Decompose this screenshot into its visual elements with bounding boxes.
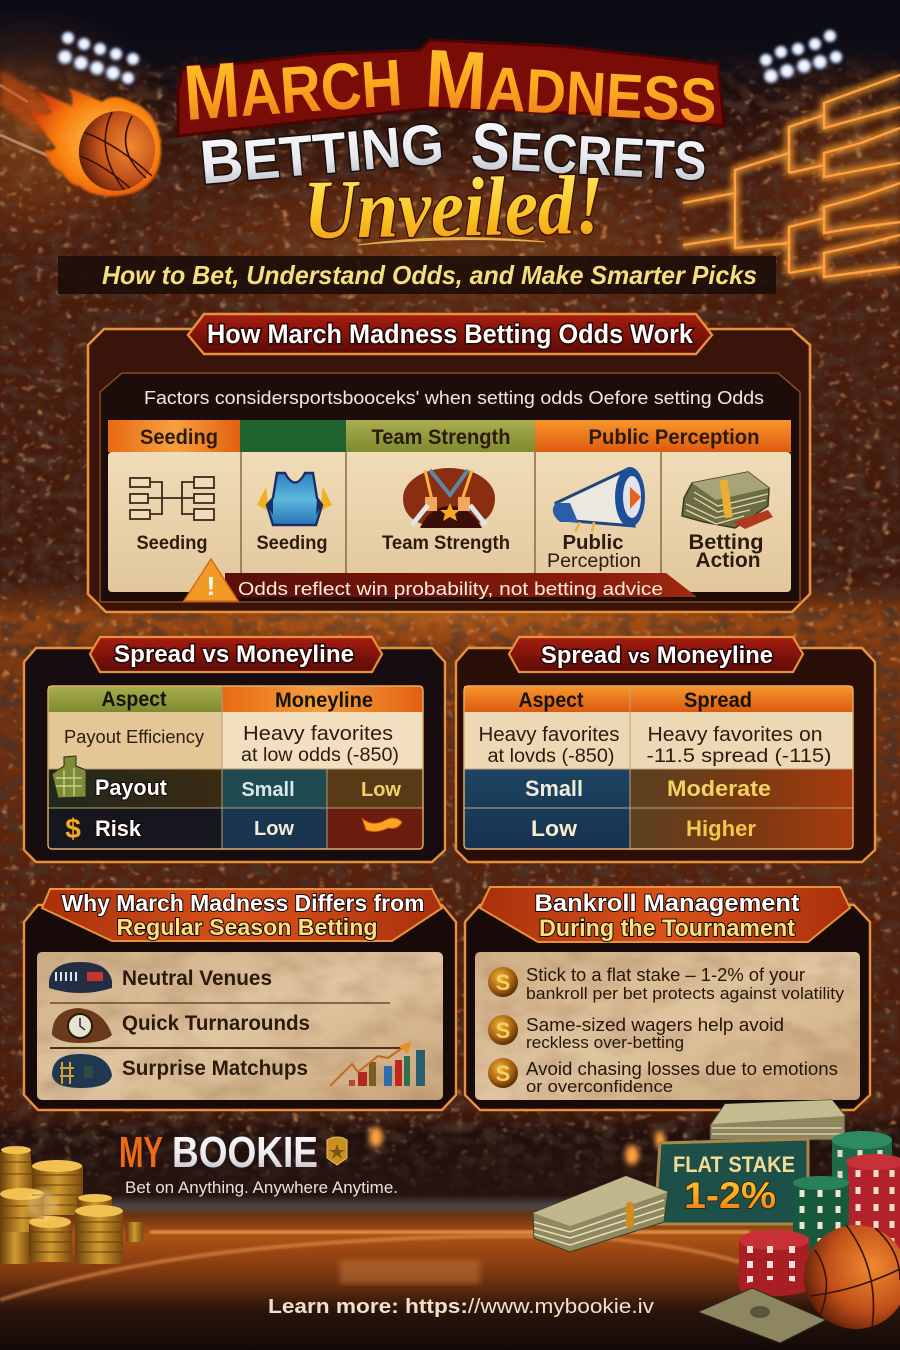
- table: factors: [108, 420, 791, 601]
- icon: coin 3: [488, 1058, 518, 1088]
- heading: [509, 637, 803, 672]
- heading: how odds work: How March Madness Betting Odds Work: [207, 319, 694, 349]
- card: differences list: [37, 952, 443, 1100]
- table: spread: Higher: [686, 816, 756, 841]
- icon: team strength ball and hands: [403, 468, 495, 528]
- icon: loose dollar bills: [698, 1288, 826, 1343]
- card: bankroll tips: bankroll per bet protects against volatility: [526, 985, 845, 1003]
- heading: Spread vs Moneyline: [541, 642, 773, 669]
- table: moneyline: Aspect: [102, 688, 166, 711]
- table: moneyline: [48, 686, 423, 849]
- panel: how odds work: [88, 314, 810, 612]
- text: icon captions: Public: [562, 532, 624, 554]
- title line: Betting Secrets: BETTING: [197, 108, 446, 198]
- text: icon captions: [136, 531, 764, 572]
- icon: flaming basketball: [0, 70, 164, 199]
- heading: Bankroll Management: [534, 890, 800, 917]
- table: spread: -11.5 spread (-115): [646, 746, 832, 767]
- heading: During the Tournament: [539, 915, 795, 942]
- header labels: Team Strength: [372, 426, 510, 449]
- text: learn more link: Learn more: https: //www.mybookie.iv: [268, 1296, 654, 1318]
- callout: odds warning: [184, 559, 697, 601]
- header labels: Public Perception: [588, 426, 760, 449]
- card: bankroll tips: reckless over-betting: [526, 1034, 684, 1052]
- icon: risk flame swoosh: [362, 818, 402, 832]
- icon: coin 2: [488, 1015, 518, 1045]
- card: differences list: Surprise Matchups: [122, 1057, 308, 1080]
- icon: stadium lights right: [758, 28, 844, 85]
- table: spread: [464, 686, 853, 849]
- sign: flat stake: [655, 1139, 808, 1224]
- table: moneyline: Risk: [95, 816, 142, 841]
- callout: odds warning: Odds reflect win probability, not betting advice: [238, 578, 663, 599]
- heading: [42, 889, 442, 941]
- icon: payout cash: [52, 756, 86, 798]
- title plate: red backing: [178, 40, 724, 136]
- text: icon captions: Perception: [547, 551, 641, 572]
- icon: basketball: [804, 1225, 900, 1329]
- icon: warning triangle: [184, 559, 238, 601]
- title line: March Madness: MARCH: [181, 34, 405, 137]
- card: bankroll tips: Same-sized wagers help avoid: [526, 1014, 784, 1035]
- icon: bracket: [130, 477, 214, 520]
- header labels: Seeding: [140, 426, 218, 449]
- table: moneyline: Payout Efficiency: [64, 727, 204, 747]
- heading: [90, 637, 382, 672]
- heading: [480, 887, 850, 942]
- icon: megaphone: [553, 467, 645, 532]
- icon: risk dollar: $: [65, 813, 81, 844]
- table: moneyline: Low: [361, 779, 401, 801]
- chart: rising bars and arrow: [330, 1041, 425, 1086]
- panel: spread vs moneyline left: [24, 637, 445, 862]
- title line: March Madness: MADNESS: [423, 33, 720, 140]
- table: moneyline: at low odds (-850): [241, 745, 399, 766]
- title line: Betting Secrets: [197, 108, 709, 198]
- table: spread: at lovds (-850): [488, 746, 614, 767]
- title line: Unveiled: Unveiled!: [303, 159, 604, 257]
- decorative: underline swash: [358, 238, 545, 245]
- icon: coin 2: S: [496, 1018, 510, 1043]
- icon: jersey: [257, 473, 332, 525]
- icon: coin 1: S: [496, 970, 510, 995]
- card: bankroll tips: Avoid chasing losses due to emotions: [526, 1058, 838, 1079]
- text: icon captions: Seeding: [136, 533, 208, 554]
- table: spread: Heavy favorites: [478, 724, 620, 746]
- panel: spread vs moneyline right: [456, 637, 875, 862]
- table: moneyline: Heavy favorites: [243, 723, 393, 745]
- header labels: [140, 426, 760, 449]
- table: moneyline: Moneyline: [275, 689, 373, 712]
- icon: neutral venue: [49, 962, 112, 993]
- icon: cash stack top: [710, 1100, 845, 1140]
- text: factors line: Factors considersportsbooceks' when setting odds Oefore setting Odds: [144, 387, 764, 408]
- panel: bankroll management: [465, 887, 870, 1110]
- subtitle bar: How to Bet, Understand Odds, and Make Smarter Picks: [102, 260, 757, 290]
- table: spread: Aspect: [518, 689, 584, 712]
- heading: Regular Season Betting: [116, 914, 378, 940]
- logo: MyBookie: [119, 1128, 398, 1197]
- table: moneyline: Payout: [95, 775, 168, 800]
- sign: flat stake: FLAT STAKE: [673, 1152, 795, 1177]
- tagline: Bet on Anything. Anywhere Anytime.: [125, 1179, 398, 1197]
- table: spread: Low: [531, 816, 578, 841]
- logo: MyBookie: BOOKIE: [172, 1128, 318, 1177]
- table: spread: Moderate: [667, 776, 771, 801]
- text: icon captions: Team Strength: [382, 533, 510, 554]
- icon: stack of cash: [682, 472, 773, 529]
- table: moneyline: Small: [241, 779, 295, 801]
- icon: warning triangle: !: [207, 571, 215, 601]
- icon: gold coin stacks: [0, 1146, 143, 1264]
- icon: coin 1: [488, 967, 518, 997]
- card: differences list: Neutral Venues: [122, 967, 272, 990]
- text: icon captions: Betting: [688, 531, 764, 554]
- icon: shield badge: [327, 1137, 347, 1165]
- icon: coin 3: S: [496, 1061, 510, 1086]
- text: icon captions: Action: [696, 549, 760, 572]
- icon: matchup board: [52, 1054, 112, 1088]
- icon: cash bundle: [533, 1176, 668, 1252]
- heading: Why March Madness Differs from: [62, 890, 424, 916]
- icon: clock: [52, 1008, 112, 1043]
- table: spread: Spread: [684, 689, 752, 712]
- panel: why march madness differs: [24, 889, 456, 1110]
- title: [178, 33, 724, 257]
- icon: poker chips: [739, 1131, 900, 1296]
- icon: stadium lights left: [56, 30, 141, 86]
- table: spread: Small: [525, 776, 583, 801]
- card: differences list: Quick Turnarounds: [122, 1012, 310, 1035]
- title line: Betting Secrets: SECRETS: [469, 108, 709, 194]
- card: bankroll tips: or overconfidence: [526, 1078, 673, 1096]
- table: moneyline: Low: [254, 818, 294, 840]
- sign: flat stake: 1-2%: [684, 1175, 776, 1216]
- logo: MyBookie: MY: [119, 1128, 163, 1177]
- card: bankroll tips: [475, 952, 860, 1100]
- card: bankroll tips: Stick to a flat stake – 1-2% of your: [526, 964, 805, 985]
- title line: March Madness: [181, 33, 720, 140]
- icon: glowing tournament bracket: [683, 75, 900, 277]
- text: icon captions: Seeding: [256, 533, 328, 554]
- heading: Spread vs Moneyline: [114, 641, 354, 668]
- table: spread: Heavy favorites on: [648, 724, 822, 746]
